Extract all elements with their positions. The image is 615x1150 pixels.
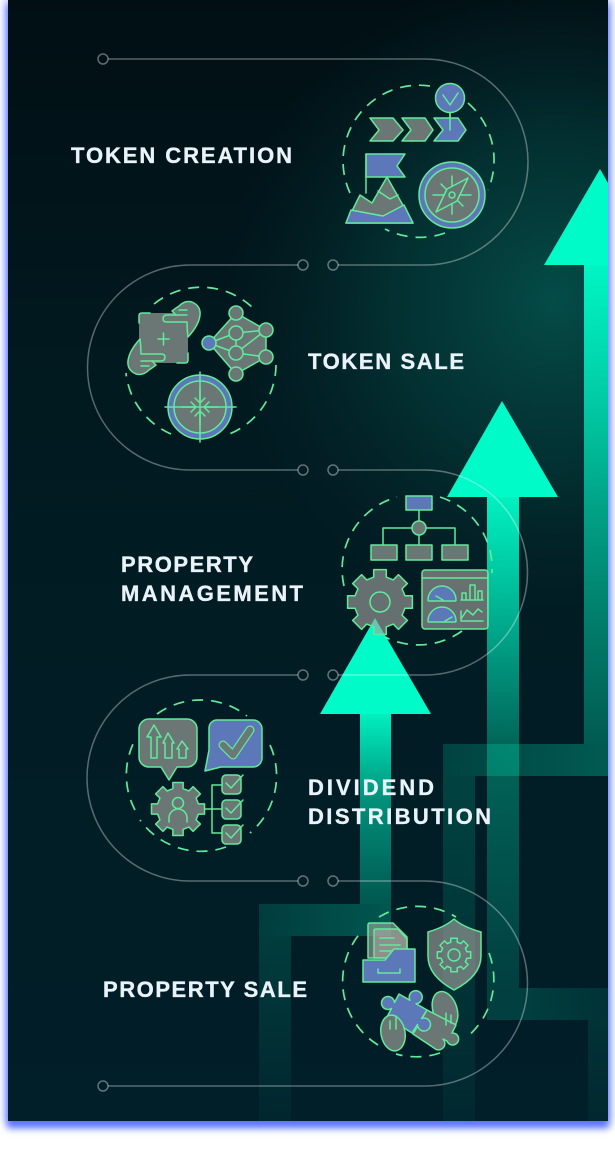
icon: check bubble <box>205 720 262 771</box>
heading: property management <box>121 552 304 606</box>
icon: shield gear <box>428 919 481 990</box>
heading: property management: MANAGEMENT <box>121 581 304 606</box>
icon: org chart <box>371 496 468 560</box>
icon: chevrons <box>370 113 466 141</box>
arrow: rightmost <box>443 169 608 1121</box>
icon: framing hands <box>128 302 200 374</box>
icon: property management cluster <box>342 496 492 645</box>
icon: flag on mountain <box>346 154 413 223</box>
icon: dividend distribution cluster <box>126 700 277 851</box>
icon: target <box>165 372 236 442</box>
icon: property sale cluster <box>343 906 494 1057</box>
icon: puzzle and hands <box>378 988 462 1053</box>
arrow: left <box>259 618 431 1121</box>
heading: property sale: PROPERTY SALE <box>103 977 307 1002</box>
icon: compass <box>419 162 485 228</box>
heading: dividend distribution: DISTRIBUTION <box>308 804 491 829</box>
icon: network graph <box>202 306 273 381</box>
winding track lines <box>87 54 528 1091</box>
icon: dashboard <box>422 570 488 629</box>
heading: dividend distribution <box>308 775 491 829</box>
icon: documents folder <box>363 923 415 982</box>
icon: checklist <box>205 775 243 844</box>
heading: property management: PROPERTY <box>121 552 253 577</box>
icon: token creation cluster <box>343 84 494 237</box>
heading: token creation: TOKEN CREATION <box>71 143 292 168</box>
heading: dividend distribution: DIVIDEND <box>308 775 434 800</box>
heading: token sale: TOKEN SALE <box>308 349 464 374</box>
icon: person gear <box>151 782 205 836</box>
arrow: middle <box>447 401 608 1121</box>
icon: gear <box>348 570 412 634</box>
icon: check circle <box>436 84 464 130</box>
icon: token sale cluster <box>126 287 276 442</box>
icon: growth arrows bubble <box>139 719 197 780</box>
